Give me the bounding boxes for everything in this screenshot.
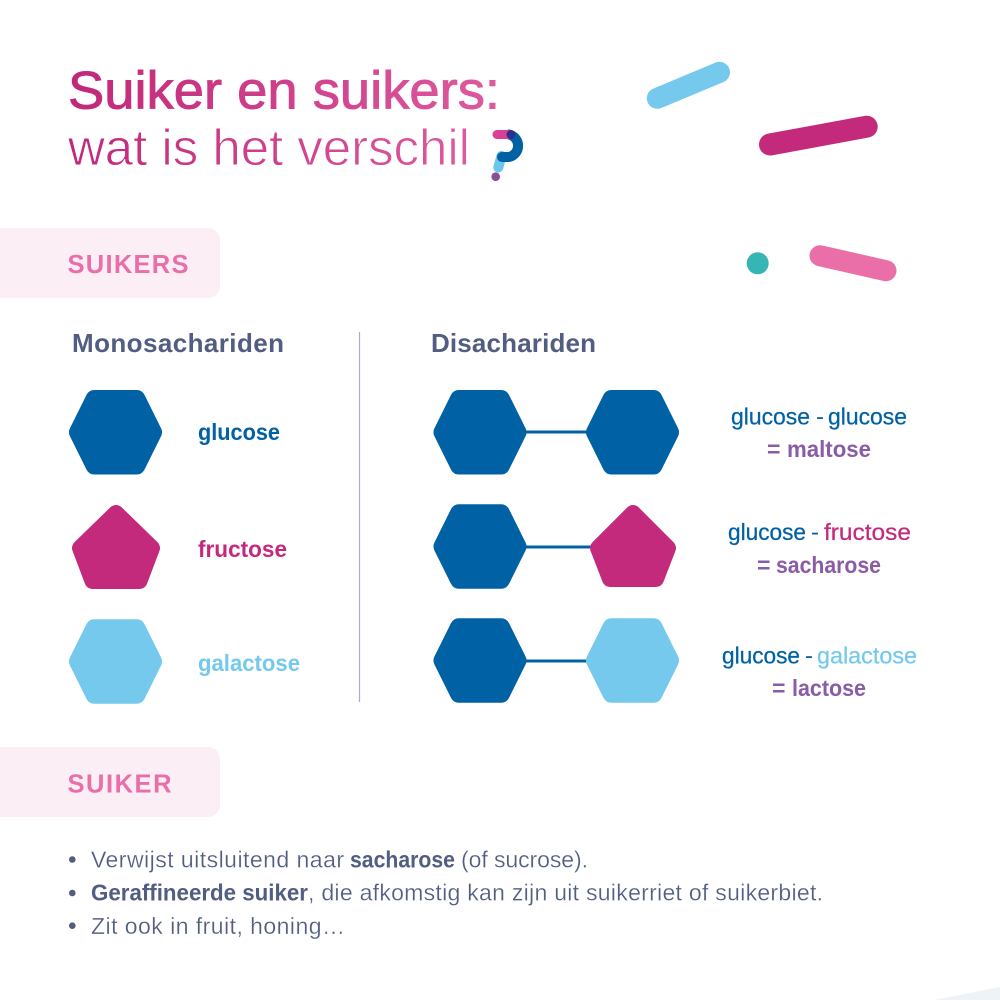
monosaccharide: glucose: glucose [198, 419, 280, 445]
disaccharide: sacharose: sacharose [776, 552, 881, 578]
disaccharide: lactose: galactose [817, 642, 917, 668]
bullet list: , die afkomstig kan zijn uit suikerriet of suikerbiet. [308, 880, 823, 906]
heading: suikers: SUIKERS [68, 251, 188, 279]
monosaccharide: glucose [78, 399, 280, 466]
disaccharide: maltose [442, 399, 907, 466]
disaccharide: lactose: = [772, 675, 785, 701]
decorative dot: teal [747, 252, 769, 274]
bullet list: sacharose [350, 846, 455, 872]
monosaccharide: fructose: fructose [198, 536, 287, 562]
disaccharide: sacharose: glucose [728, 519, 806, 545]
heading: suiker: SUIKER [68, 770, 172, 798]
divider [358, 332, 360, 702]
title: wat is het verschil [67, 119, 470, 176]
disaccharide: maltose: glucose [828, 404, 907, 430]
monosaccharide: galactose [78, 628, 300, 695]
disaccharide: maltose: glucose [731, 404, 810, 430]
heading: monosachariden: Monosachariden [72, 328, 284, 358]
monosaccharide: galactose: galactose [198, 650, 300, 676]
title: Suiker en suikers: [68, 62, 500, 120]
heading: suiker [0, 747, 220, 817]
decorative bar: light blue [657, 72, 720, 98]
disaccharide: lactose: - [805, 642, 813, 668]
icon: question mark [491, 130, 518, 181]
disaccharide: lactose: glucose [722, 642, 800, 668]
disaccharide: lactose: lactose [792, 675, 866, 701]
heading: disachariden: Disachariden [431, 328, 596, 358]
monosaccharide: fructose [80, 513, 287, 581]
disaccharide: sacharose: - [811, 519, 819, 545]
bullet list [69, 846, 823, 939]
disaccharide: maltose: - [816, 404, 824, 430]
disaccharide: maltose: = [767, 436, 780, 462]
bullet list: Zit ook in fruit, honing… [91, 913, 345, 939]
heading: suikers [0, 228, 220, 298]
disaccharide: maltose: maltose [787, 436, 871, 462]
disaccharide: lactose [442, 627, 917, 701]
title [67, 62, 500, 176]
bullet list: (of sucrose). [461, 846, 588, 872]
disaccharide: sacharose: fructose [824, 519, 911, 545]
bullet list: Geraffineerde suiker [91, 880, 308, 906]
disaccharide: sacharose: = [757, 552, 770, 578]
decorative bar: magenta [770, 127, 867, 144]
disaccharide: sacharose [442, 513, 911, 580]
bullet list: Verwijst uitsluitend naar [91, 846, 344, 872]
decorative bar: pink [820, 256, 886, 271]
